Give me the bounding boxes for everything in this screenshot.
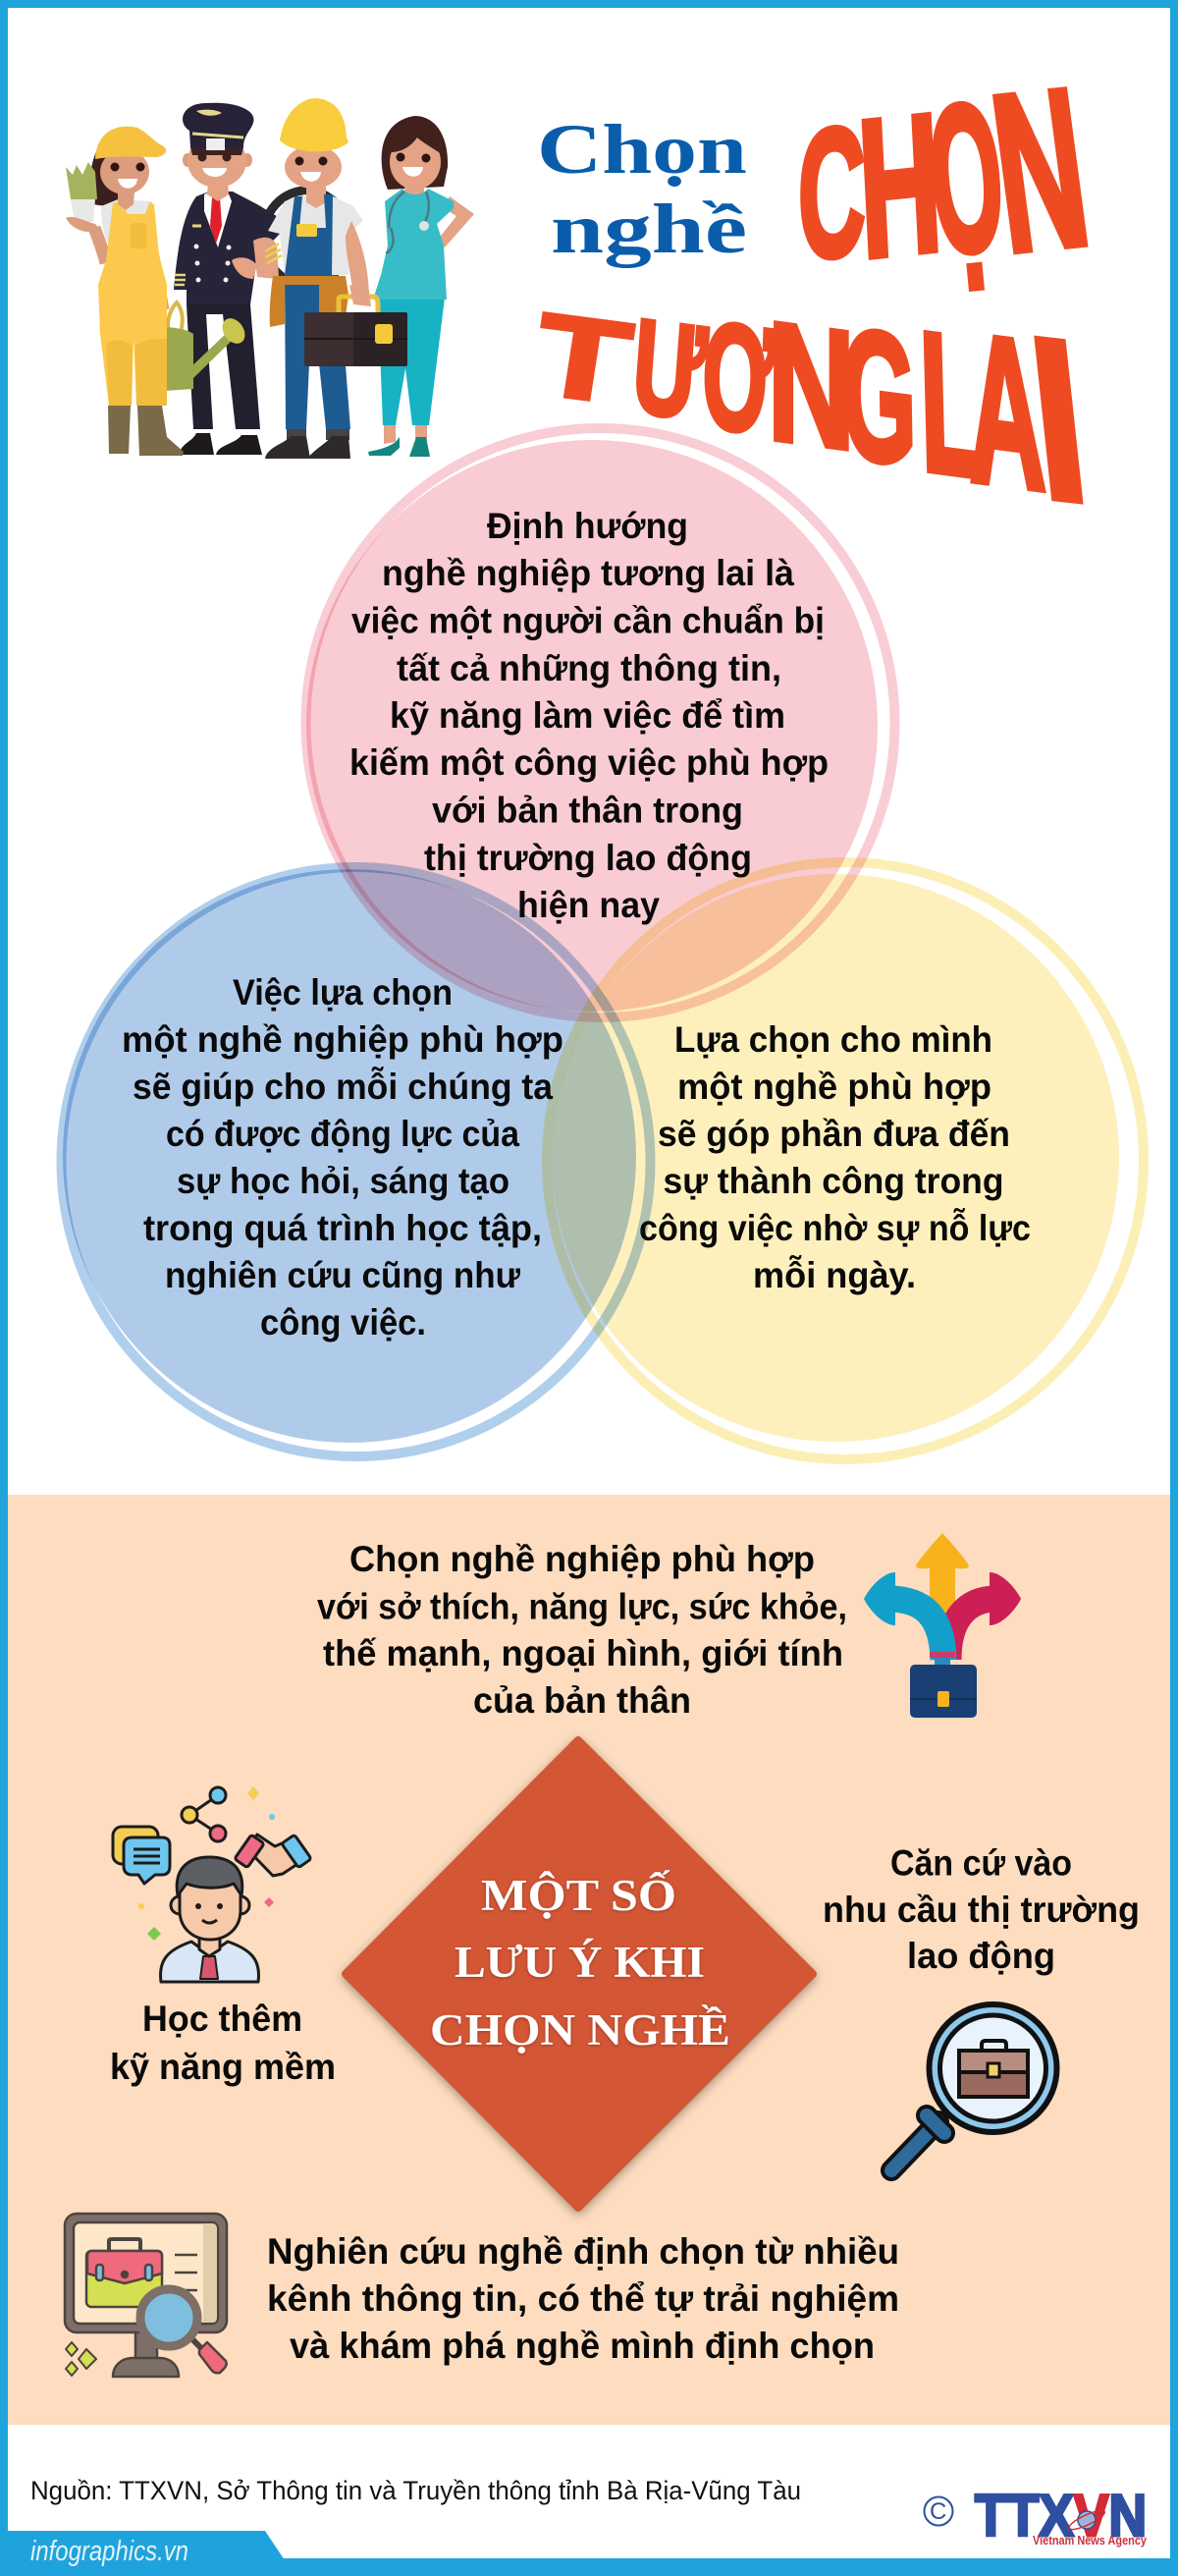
title: Chọn nghề: Chọn [537, 110, 747, 189]
nurse [368, 116, 474, 457]
text: some notes when choosing: CHỌN NGHỀ [430, 2005, 730, 2055]
title: CHỌN [798, 41, 1100, 300]
text: labour market: nhu cầu thị trường [823, 1890, 1140, 1930]
title: TƯƠNG LAI: Ơ [700, 291, 776, 467]
text: benefits of choosing: nghiên cứu cũng như [165, 1255, 520, 1295]
illustration: four workers [66, 98, 474, 459]
text: suitable career: Chọn nghề nghiệp phù hợp [349, 1539, 815, 1579]
icon: arrows and briefcase [864, 1533, 1021, 1718]
text: soft skills: kỹ năng mềm [110, 2047, 336, 2087]
title: TƯƠNG LAI: T [527, 290, 639, 429]
title: Chọn nghề [537, 110, 747, 268]
text: suitable career [317, 1539, 847, 1721]
text: career orientation: kiếm một công việc phù hợp [349, 742, 829, 783]
panel: yellow circle [547, 862, 1144, 1459]
title: TƯƠNG LAI [527, 286, 1097, 551]
text: labour market: lao động [907, 1936, 1055, 1976]
title: CHỌN: N [981, 41, 1100, 299]
text: success: mỗi ngày. [753, 1255, 916, 1295]
hose behind worker [263, 191, 349, 285]
text: benefits of choosing: sự học hỏi, sáng tạo [177, 1161, 509, 1201]
watering can [164, 302, 249, 391]
icon: magnifier with briefcase [891, 2004, 1056, 2170]
pilot [174, 103, 280, 455]
text: success [639, 1019, 1031, 1295]
title: Chọn nghề: nghề [551, 190, 747, 268]
text: some notes when choosing: MỘT SỐ [481, 1871, 676, 1920]
text: success: Lựa chọn cho mình [674, 1019, 992, 1060]
icon: monitor with magnifier [65, 2214, 227, 2377]
text: success: một nghề phù hợp [677, 1067, 991, 1107]
text: career orientation: thị trường lao động [424, 838, 752, 878]
text: benefits of choosing: có được động lực của [166, 1114, 519, 1154]
title: TƯƠNG LAI: A [964, 291, 1048, 535]
text: career orientation: kỹ năng làm việc để tìm [390, 695, 785, 736]
footer tab: infographics.vn: infographics.vn [30, 2536, 188, 2567]
text: research career: và khám phá nghề mình định chọn [290, 2326, 875, 2366]
title: TƯƠNG LAI: G [839, 290, 918, 505]
panel: pink circle [306, 428, 895, 1017]
logo: TTXVN: C [930, 2498, 946, 2525]
title: CHỌN: Ọ [920, 58, 1013, 299]
icon: person with soft skills [113, 1786, 311, 1982]
text: labour market: Căn cứ vào [890, 1842, 1072, 1884]
text: soft skills [110, 1999, 336, 2087]
footer tab: infographics.vn [0, 2531, 285, 2567]
text: success: sự thành công trong [664, 1161, 1003, 1201]
diamond: title [346, 1740, 813, 2208]
text: career orientation: hiện nay [517, 885, 660, 925]
title: TƯƠNG LAI: I [1020, 290, 1097, 551]
title: TƯƠNG LAI: Ư [628, 292, 711, 449]
text: career orientation: Định hướng [487, 506, 688, 546]
text: suitable career: thế mạnh, ngoại hình, giới tính [323, 1633, 843, 1673]
text: research career: kênh thông tin, có thể tự trải nghiệm [267, 2278, 899, 2319]
text: career orientation: việc một người cần chuẩn bị [351, 601, 825, 640]
title: CHỌN: C [798, 88, 866, 299]
text: some notes when choosing [430, 1871, 730, 2055]
text: benefits of choosing: công việc. [260, 1302, 426, 1343]
text: some notes when choosing: LƯU Ý KHI [455, 1938, 705, 1987]
construction worker [253, 98, 407, 459]
title: TƯƠNG LAI: L [917, 291, 986, 521]
text: suitable career: với sở thích, năng lực, sức khỏe, [317, 1587, 847, 1626]
text: success: sẽ góp phần đưa đến [658, 1114, 1010, 1154]
text: career orientation: tất cả những thông tin, [397, 648, 781, 688]
text: career orientation: nghề nghiệp tương lai là [382, 553, 794, 593]
text: career orientation [349, 506, 829, 925]
text: career orientation: với bản thân trong [432, 790, 743, 831]
logo: TTXVN: TTXVN [975, 2483, 1147, 2549]
title: TƯƠNG LAI: N [768, 286, 855, 485]
panel: notes background [8, 1495, 1170, 2425]
text: benefits of choosing: sẽ giúp cho mỗi chúng ta [133, 1067, 553, 1107]
title: CHỌN: H [854, 74, 945, 300]
text: labour market [823, 1842, 1140, 1976]
text: benefits of choosing: một nghề nghiệp phù hợp [122, 1019, 563, 1060]
text: benefits of choosing: Việc lựa chọn [233, 972, 453, 1013]
text: soft skills: Học thêm [142, 1999, 302, 2039]
text: benefits of choosing [122, 972, 563, 1343]
text: source: Nguồn: TTXVN, Sở Thông tin và Truyền thông tỉnh Bà Rịa-Vũng Tàu [30, 2476, 801, 2505]
text: benefits of choosing: trong quá trình học tập, [143, 1208, 542, 1248]
logo: TTXVN: Vietnam News Agency [1033, 2534, 1147, 2548]
farmer woman [66, 127, 184, 456]
text: suitable career: của bản thân [473, 1680, 691, 1721]
text: research career: Nghiên cứu nghề định chọn từ nhiều [267, 2231, 899, 2272]
text: success: công việc nhờ sự nỗ lực [639, 1208, 1031, 1248]
panel: blue circle [61, 867, 650, 1456]
text: research career [267, 2231, 899, 2366]
